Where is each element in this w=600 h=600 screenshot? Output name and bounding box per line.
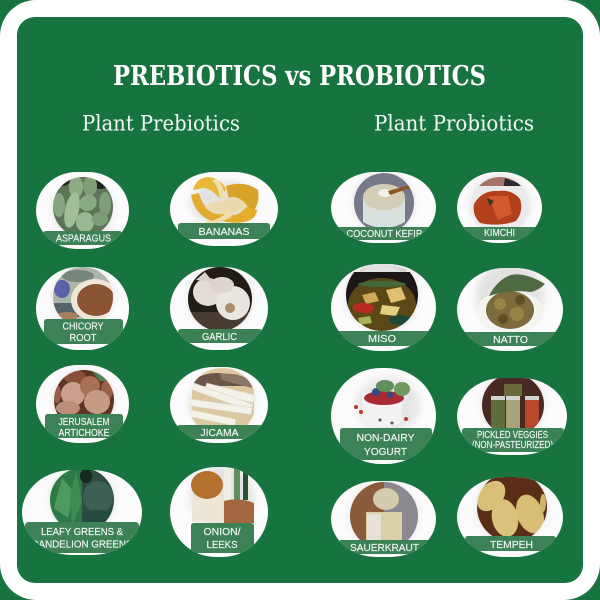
label: leafy greens and dandelion greens: DANDELION GREENS — [32, 538, 132, 550]
food card: coconut kefir — [331, 172, 436, 243]
food card: chicory root — [36, 267, 129, 350]
heading: plant prebiotics: Plant Prebiotics — [82, 112, 240, 136]
label: onion and leeks: LEEKS — [206, 539, 238, 551]
label: coconut kefir: COCONUT KEFIR — [346, 228, 423, 240]
label: garlic: GARLIC — [202, 331, 237, 343]
label: miso: MISO — [368, 333, 396, 345]
label: tempeh: TEMPEH — [490, 539, 533, 551]
label: leafy greens and dandelion greens — [25, 522, 139, 553]
food card: asparagus — [36, 172, 129, 249]
label: onion and leeks — [191, 523, 254, 553]
food card: natto — [457, 262, 563, 351]
label: sauerkraut: SAUERKRAUT — [350, 542, 420, 554]
label: pickled veggies non-pasteurized: PICKLED VEGGIES — [477, 429, 548, 441]
food card: tempeh — [457, 472, 563, 557]
label: non-dairy yogurt — [340, 428, 432, 460]
food card: pickled veggies — [457, 374, 567, 455]
label: jerusalem artichoke: JERUSALEM — [58, 416, 110, 428]
label: chicory root — [44, 319, 123, 344]
label: bananas: BANANAS — [198, 226, 250, 238]
heading: plant probiotics: Plant Probiotics — [374, 112, 534, 136]
food card: jicama — [170, 367, 268, 443]
label: pickled veggies non-pasteurized: (NON-PASTEURIZED) — [472, 439, 553, 451]
food card: non-dairy yogurt — [331, 368, 436, 464]
label: jerusalem artichoke: ARTICHOKE — [58, 427, 110, 439]
food card: miso — [331, 259, 436, 351]
food card: sauerkraut — [331, 481, 436, 557]
label: jerusalem artichoke — [45, 414, 123, 439]
label: non-dairy yogurt: NON-DAIRY — [356, 432, 414, 444]
food card: kimchi — [457, 172, 542, 243]
label: leafy greens and dandelion greens: LEAFY GREENS & — [41, 526, 123, 538]
label: onion and leeks: ONION/ — [204, 526, 241, 538]
label: chicory root: ROOT — [70, 332, 97, 344]
label: jicama: JICAMA — [200, 427, 238, 439]
label: chicory root: CHICORY — [62, 320, 104, 332]
label: pickled veggies non-pasteurized — [462, 428, 564, 452]
title: PREBIOTICS vs PROBIOTICS — [113, 61, 486, 92]
label: asparagus: ASPARAGUS — [56, 232, 111, 244]
label: natto: NATTO — [493, 334, 528, 346]
food card: onion and leeks — [170, 465, 268, 557]
label: kimchi: KIMCHI — [484, 227, 515, 239]
food card: garlic — [170, 267, 268, 350]
food card: leafy greens and dandelion greens — [22, 468, 142, 555]
food card: jerusalem artichoke — [36, 365, 129, 443]
food card: bananas — [170, 172, 278, 246]
label: non-dairy yogurt: YOGURT — [364, 446, 408, 458]
